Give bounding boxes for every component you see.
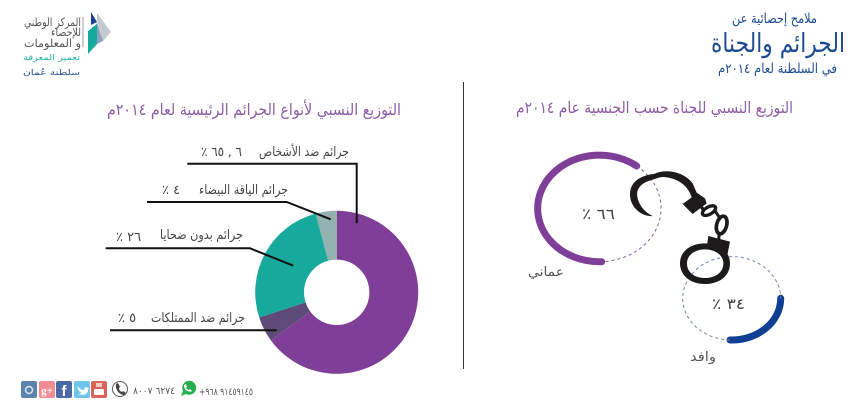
logo tagline: تعمير المعرفة [23,53,80,62]
donut chart [255,211,418,374]
logo mark [88,12,111,54]
icon: instagram [21,381,37,398]
segment: property crimes [259,302,310,340]
title kicker: ملامح إحصائية عن [732,11,817,27]
callout: crimes against persons: ٪ ٦٥ , ٦ [201,145,242,160]
contact bar [21,381,253,400]
whatsapp number: +٩٦٨ ٩١٤٥٩١٤٥ [199,387,253,398]
callout: crimes against persons [187,143,357,223]
icon: twitter [74,381,90,398]
callout: victimless crimes [106,228,293,266]
label: expatriate: وافد [690,350,716,365]
heading: crime types: التوزيع النسبي لأنواع الجرائم الرئيسية لعام ٢٠١٤م [107,99,401,120]
icon: youtube [91,381,107,398]
divider [462,82,464,369]
heading: nationality: التوزيع النسبي للجناة حسب الجنسية عام ٢٠١٤م [516,98,793,118]
callout: crimes against persons: جرائم ضد الأشخاص [259,143,349,160]
ring: omani 66% [528,155,661,280]
segment: white collar crimes [316,211,337,261]
title subline: في السلطنة لعام ٢٠١٤م [718,61,837,77]
logo text: centre name: للإحصاء [51,25,81,39]
icon: google plus [39,381,55,398]
logo text: centre name: المركز الوطني [24,15,81,30]
ring: expatriate 34%: ٪ ٣٤ [712,295,745,313]
icon: phone [112,382,128,396]
logo text: centre name: و المعلومات [24,36,81,51]
callout: victimless crimes: جرائم بدون ضحايا [160,228,243,243]
title block [711,11,845,77]
ring: omani 66%: ٪ ٦٦ [582,205,615,223]
phone number: ٨٠٠٧ ٦٢٧٤ [133,386,175,397]
callout: property crimes: جرائم ضد الممتلكات [151,311,245,326]
icon: google plus: g+ [41,385,53,397]
ring: expatriate 34% [683,257,781,365]
label: omani: عماني [528,265,564,280]
callout: white collar crimes [147,183,331,219]
segment: crimes against persons [271,211,418,374]
callout: white collar crimes: جرائم الياقة البيضاء [199,183,288,198]
logo [23,12,111,77]
logo country: سلطنة عُمان [23,68,80,77]
icon: facebook: f [62,383,68,400]
segment: victimless crimes [255,214,328,318]
callout: property crimes: ٪ ٥ [118,311,136,326]
logo text: centre name [24,15,81,51]
icon: handcuffs [630,171,730,284]
callout: victimless crimes: ٪ ٢٦ [116,230,141,245]
callout: white collar crimes: ٪ ٤ [162,183,180,198]
icon: whatsapp [181,381,196,396]
callout: property crimes [110,311,277,330]
icon: facebook [56,381,72,400]
